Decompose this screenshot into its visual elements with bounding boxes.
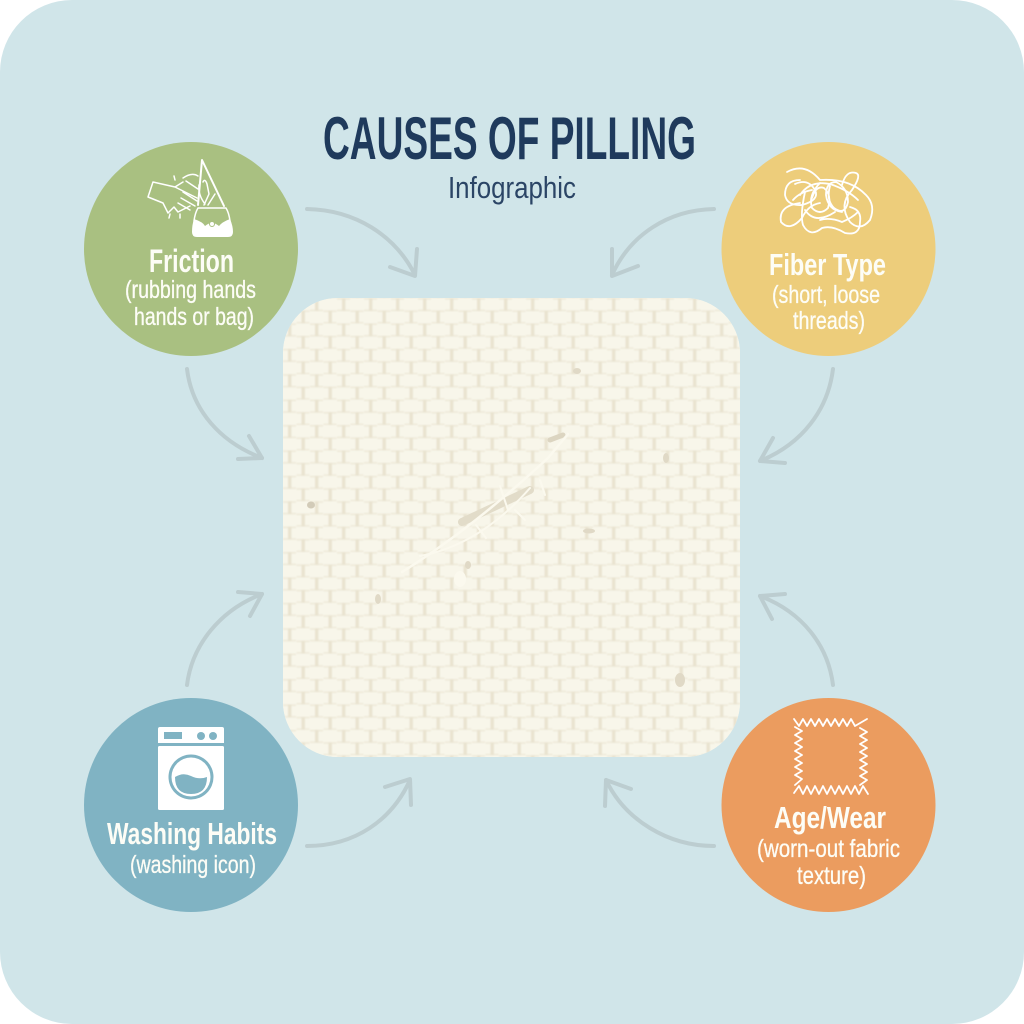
panel: central fabric swatch: [280, 295, 743, 760]
label: fiber type: Fiber Type: [769, 247, 886, 282]
label: friction: Friction: [149, 243, 234, 279]
panel: age/wear: [722, 698, 936, 912]
title: CAUSES OF PILLING: [323, 105, 696, 172]
arrow: washing habits to fabric: [307, 779, 411, 846]
description: fiber type: threads): [793, 307, 865, 335]
fabric damage: pilled snag: [402, 434, 568, 587]
arrow: fiber type down to fabric: [760, 369, 833, 463]
panel: friction: [84, 142, 298, 356]
panel: fiber type: [722, 142, 936, 356]
arrow: friction to fabric: [307, 209, 417, 276]
panel: washing habits: [84, 698, 298, 912]
description: fiber type: (short, loose: [772, 281, 880, 309]
arrow: washing habits up to fabric: [187, 592, 262, 685]
description: age/wear: texture): [797, 862, 866, 890]
description: fiber type: [772, 281, 880, 335]
description: age/wear: [757, 835, 900, 890]
description: friction: [125, 276, 256, 331]
arrow: fiber type to fabric: [612, 209, 714, 276]
label: age/wear: Age/Wear: [774, 800, 886, 835]
icon: worn-out fabric square: [794, 719, 868, 794]
description: age/wear: (worn-out fabric: [757, 835, 900, 863]
arrow: age/wear to fabric: [605, 780, 714, 846]
description: washing habits: (washing icon): [130, 851, 256, 879]
icon: washing machine: [158, 727, 224, 810]
fabric damage: specks: [307, 368, 685, 687]
description: friction: hands or bag): [134, 303, 254, 331]
arrow: friction down to fabric: [187, 369, 262, 459]
icon: tangled threads: [781, 168, 872, 234]
icon: hands rubbing and bag: [148, 160, 233, 237]
label: washing habits: Washing Habits: [107, 816, 277, 851]
subtitle: Infographic: [448, 170, 576, 205]
description: friction: (rubbing hands: [125, 276, 256, 304]
arrow: age/wear up to fabric: [760, 594, 833, 685]
